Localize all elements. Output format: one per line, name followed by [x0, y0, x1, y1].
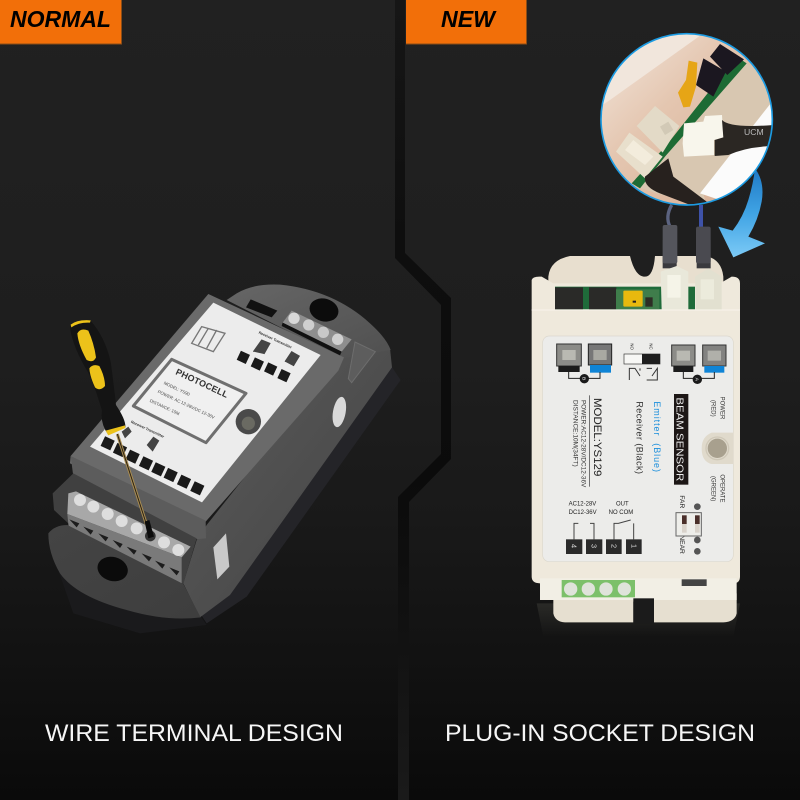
caption: plug-in socket design: PLUG-IN SOCKET DESIGN — [445, 720, 755, 747]
white socket lower — [616, 133, 663, 178]
photocell badge — [133, 359, 246, 443]
far near range switch — [676, 495, 701, 555]
far near range switch: NEAR — [678, 535, 685, 554]
model block: POWER:AC12-28V/DC12-36V — [580, 400, 586, 487]
device front face — [71, 456, 206, 540]
divider: angled centre line — [395, 0, 451, 800]
handle yellow grips — [71, 320, 125, 435]
indicator lens — [230, 402, 273, 437]
bottom edge and green terminal block — [540, 578, 737, 623]
green circuit board — [632, 57, 747, 188]
upper number terminals — [237, 351, 290, 382]
product: plug-in socket device — [532, 240, 740, 637]
upper sensor symbols — [253, 340, 299, 366]
lower beige shelf — [641, 64, 770, 200]
beam sensor title — [674, 394, 688, 485]
numbered terminals: 4 — [570, 544, 579, 548]
emitter line: Emitter (Blue) — [652, 401, 662, 472]
NO NC switch diagram — [624, 343, 660, 380]
model block — [571, 395, 603, 487]
label tab: new — [406, 0, 527, 44]
numbered terminals: 3 — [590, 544, 599, 548]
connector diagram B: B — [581, 377, 587, 381]
operate caption: (GREEN) — [710, 476, 716, 501]
white label — [90, 303, 321, 502]
white panel label — [543, 336, 733, 562]
rear terminal block — [282, 311, 352, 355]
connector diagram A: A — [694, 378, 700, 382]
black sockets — [696, 44, 744, 97]
side step highlights — [532, 309, 740, 311]
connector diagram B — [557, 344, 612, 383]
connector diagram A — [672, 345, 726, 384]
numbered terminals: 1 — [629, 544, 638, 548]
numbered terminals: 2 — [609, 544, 618, 548]
device reflection — [537, 603, 740, 637]
NO NC switch diagram: NO — [630, 343, 635, 350]
power terminal captions — [569, 502, 597, 516]
front mounting flange — [48, 525, 201, 619]
upper black cable — [715, 120, 773, 156]
photocell badge: PHOTOCELL — [174, 367, 230, 400]
receiver line: Receiver (Black) — [635, 401, 645, 474]
side panel outline — [348, 342, 375, 383]
model block: MODEL:YS129 — [591, 398, 603, 476]
plug and cable: left — [661, 240, 688, 310]
model block: DISTANCE:10M(34FT) — [571, 400, 577, 467]
white gap — [700, 104, 772, 199]
power terminal captions: AC12-28V — [569, 502, 596, 508]
rear slot — [246, 299, 277, 317]
screwdriver — [70, 320, 154, 538]
photocell badge: POWER: AC 12-28V/DC 12-36V — [157, 389, 216, 420]
white plug — [683, 115, 723, 157]
plug and cable: right — [695, 240, 722, 310]
circuit board strip — [555, 287, 695, 309]
device top face — [70, 294, 344, 522]
connection wires above the device — [663, 205, 711, 263]
side sticker — [213, 533, 229, 579]
lower number terminals — [101, 436, 204, 495]
far near range switch: FAR — [678, 495, 685, 508]
wiring diagram at top of label — [192, 327, 225, 352]
label tab: normal — [0, 0, 122, 44]
lower sensor symbols — [122, 427, 159, 452]
white socket upper — [637, 106, 679, 153]
beam sensor title: BEAM SENSOR — [674, 397, 685, 481]
rear mounting hole — [307, 295, 341, 325]
device body — [532, 277, 740, 583]
power terminal captions: DC12-36V — [569, 510, 597, 516]
magnified detail circle — [600, 33, 773, 210]
power caption: POWER — [719, 397, 725, 420]
device reflection: right — [200, 367, 401, 623]
pale upper band — [603, 34, 700, 104]
photocell badge: MODEL: YS90 — [163, 380, 191, 397]
rear cover with notch — [548, 256, 723, 310]
numbered terminals — [566, 539, 642, 554]
power caption: (RED) — [710, 400, 716, 417]
operate caption: OPERATE — [719, 474, 725, 502]
lower label caption: Receiver Transmitter — [130, 420, 165, 439]
output terminal captions — [609, 502, 633, 516]
upper label captions: Receiver Transmitter — [258, 331, 293, 350]
cable marking: UCM — [744, 127, 764, 137]
beige cover background — [602, 36, 754, 204]
terminal block with screws — [67, 491, 191, 584]
circle outline — [601, 34, 772, 205]
label tab: new: NEW — [441, 6, 497, 32]
rear mounting flange — [227, 285, 391, 358]
lower tabs — [553, 593, 737, 622]
device reflection: front — [50, 547, 207, 633]
power caption — [710, 397, 725, 420]
screwdriver handle — [70, 320, 125, 435]
label tab: normal: NORMAL — [10, 6, 111, 32]
yellow jumper — [678, 61, 697, 107]
curved blue arrow — [718, 168, 765, 257]
output terminal captions: OUT — [616, 502, 629, 508]
product: wire terminal photocell device with screwdriver — [48, 285, 401, 633]
screwdriver shaft — [117, 434, 154, 538]
yellow jumper — [623, 291, 643, 307]
operate caption — [710, 474, 725, 502]
output terminal captions: NO COM — [609, 510, 633, 516]
device right side face — [183, 348, 392, 617]
terminal wiring lines — [574, 520, 634, 539]
lower black cable — [645, 158, 707, 210]
indicator LED — [702, 433, 733, 464]
caption: wire terminal design: WIRE TERMINAL DESIGN — [45, 720, 343, 747]
front mounting hole — [95, 553, 131, 585]
terminal opening — [53, 473, 197, 584]
NO NC switch diagram: NC — [648, 343, 653, 350]
photocell badge: DISTANCE: 10M — [149, 398, 181, 416]
white round seal — [330, 396, 348, 428]
